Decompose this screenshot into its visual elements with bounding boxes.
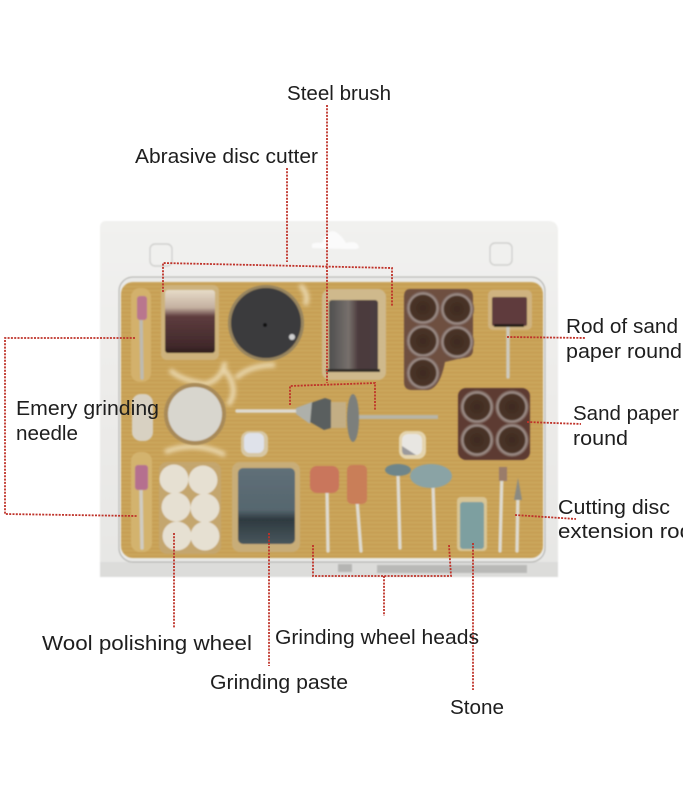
item: four sanding rings — [458, 388, 530, 460]
label: sand paper round — [573, 403, 679, 450]
label: grinding paste: Grinding paste — [210, 672, 348, 694]
line: grinding wheel heads — [313, 545, 451, 616]
label: stone: Stone — [450, 697, 504, 719]
line: cutting disc extension rod — [515, 515, 576, 519]
line: emery grinding needle — [5, 338, 137, 516]
line: grinding paste — [268, 533, 270, 666]
label: cutting disc extension rod — [558, 497, 683, 543]
line: rod of sand paper round — [507, 337, 586, 338]
label: emery grinding needle — [16, 398, 159, 445]
label: abrasive disc cutter: Abrasive disc cutter — [135, 146, 318, 168]
line: stone — [472, 543, 474, 690]
label: steel brush: Steel brush — [287, 83, 391, 105]
blister card packaging — [100, 221, 558, 577]
item: six sanding rings — [404, 289, 474, 390]
item: sanding flap wheel on rod — [488, 290, 532, 377]
line: wool polishing wheel — [173, 533, 175, 628]
label: rod of sand paper round — [566, 316, 682, 363]
label: emery grinding needle: Emery grinding — [16, 398, 159, 420]
label: grinding wheel heads: Grinding wheel heads — [275, 627, 479, 649]
item: white capsule — [132, 394, 153, 441]
line: steel brush — [290, 105, 375, 410]
line: abrasive disc cutter — [163, 168, 392, 307]
item: square clip right — [399, 431, 426, 459]
item: sandpaper spool — [161, 285, 219, 360]
label: sand paper round: Sand paper — [573, 403, 679, 425]
yellow tray — [121, 282, 543, 558]
item: emery needle bottom — [131, 452, 152, 552]
label: rod of sand paper round: Rod of sand — [566, 316, 678, 338]
tray moulding highlights — [165, 285, 307, 455]
item: steel brush mandrel — [237, 394, 438, 442]
item: abrasive disc — [228, 285, 304, 361]
item: steel brush sleeve spool — [322, 289, 386, 380]
item: emery needle top — [131, 288, 151, 382]
item: felt polishing disc — [164, 383, 226, 445]
item: blue-grey grinding heads — [385, 464, 452, 549]
label: cutting disc extension rod: Cutting disc — [558, 497, 670, 519]
label: emery grinding needle: needle — [16, 423, 78, 445]
item: extension rods — [499, 467, 522, 551]
callout lines — [5, 105, 586, 690]
label: cutting disc extension rod: extension rod — [558, 521, 683, 543]
label: rod of sand paper round: paper round — [566, 341, 682, 363]
item: square clip left — [241, 431, 268, 457]
line: sand paper round — [527, 422, 581, 424]
item: six wool polishing wheels — [159, 462, 221, 554]
label: sand paper round: round — [573, 428, 628, 450]
item: blue stone — [457, 497, 487, 551]
item: orange grinding heads — [310, 465, 367, 551]
item: grinding paste — [232, 462, 300, 552]
label: wool polishing wheel: Wool polishing wheel — [42, 633, 252, 655]
